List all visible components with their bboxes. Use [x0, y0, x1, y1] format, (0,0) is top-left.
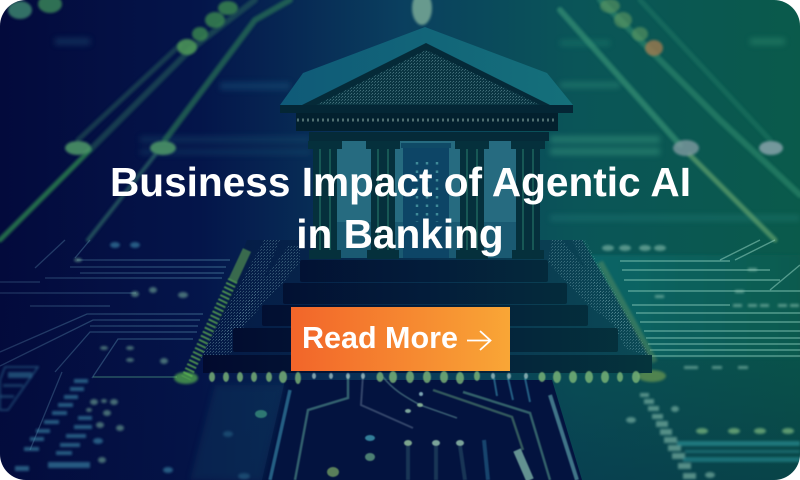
- chip stepped base: [203, 260, 652, 373]
- right circuit panel: [592, 255, 780, 358]
- blurred upper circuit bands: [55, 38, 800, 221]
- center lower pads: [255, 392, 464, 477]
- bank door: [401, 143, 451, 258]
- read more button: [291, 307, 510, 371]
- bank pediment frame: [300, 43, 552, 106]
- bank dentils: [297, 118, 556, 122]
- bank architrave: [309, 132, 549, 141]
- title second line: in Banking: [296, 211, 504, 257]
- chip side pins left: [186, 250, 247, 378]
- center lower traces: [270, 375, 577, 480]
- green glow left corner: [174, 372, 198, 384]
- bank interior wall: [337, 141, 516, 222]
- bank pediment: [316, 50, 540, 105]
- left lower circuit traces: [0, 240, 230, 450]
- icon: right arrow: [467, 331, 490, 350]
- left lower circuit pads: [0, 242, 250, 479]
- column flutes: [320, 149, 533, 250]
- bank cornice: [280, 105, 573, 113]
- bank columns: [308, 141, 545, 259]
- green glow right corner: [638, 370, 666, 382]
- right diagonal traces: [560, 0, 800, 240]
- chip side pins right: [600, 262, 655, 362]
- bank lower wall shade: [335, 222, 525, 258]
- chip bottom pins: [209, 371, 640, 384]
- right lower circuit traces: [620, 240, 800, 356]
- bank frieze: [296, 113, 558, 131]
- bank roof: [280, 27, 573, 105]
- title: Business Impact of Agentic AI: [110, 159, 691, 205]
- left diagonal traces: [0, 0, 290, 240]
- right lower circuit pads: [602, 245, 800, 479]
- chip package: [200, 240, 652, 360]
- lower left panel glow: [190, 385, 285, 480]
- lower center dark panel: [262, 380, 582, 480]
- button label: Read More: [302, 321, 458, 355]
- blurred green nodes top: [8, 0, 783, 156]
- bank building: [280, 27, 573, 259]
